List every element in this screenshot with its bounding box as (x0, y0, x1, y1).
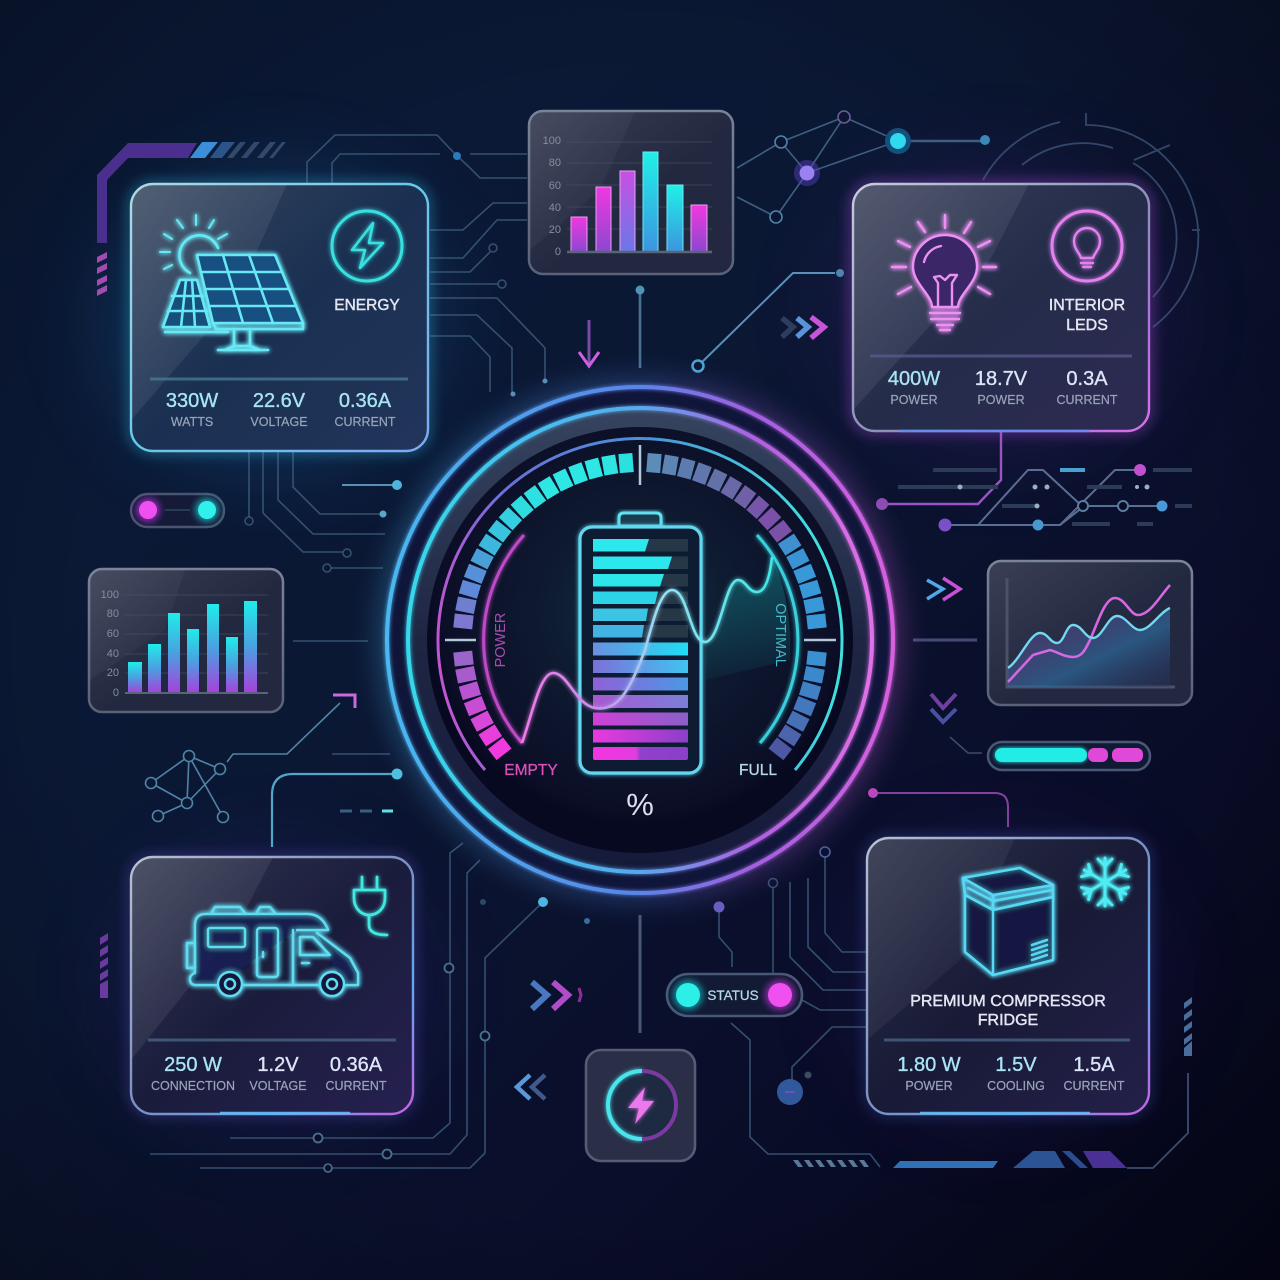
curve fill (705, 557, 790, 680)
stats: 0.36A (330, 1054, 383, 1076)
panel: camper van (131, 857, 413, 1114)
connector to progress bar (950, 737, 982, 753)
label: full: FULL (739, 762, 777, 779)
circuit traces: left of fridge panel (714, 847, 880, 1167)
toggle: pink and cyan (131, 494, 224, 527)
gauge rings (387, 387, 893, 893)
stats: CURRENT (1056, 393, 1118, 407)
panel: energy (131, 184, 428, 451)
bar chart: left: 100 (101, 589, 119, 601)
gauge ticks: right (646, 453, 827, 760)
arrow: down (579, 320, 599, 366)
gauge halo (390, 390, 890, 890)
panel: interior LEDs (853, 184, 1149, 431)
stats: CURRENT (334, 415, 396, 429)
icon: bulb badge (1052, 211, 1122, 281)
icon: snowflake (1081, 858, 1129, 906)
label (1049, 297, 1125, 334)
stats: WATTS (171, 415, 213, 429)
bar chart: top: 20 (549, 224, 561, 236)
gauge tick marks: cardinal (445, 445, 836, 640)
stats: POWER (890, 393, 938, 407)
stats: POWER (905, 1079, 953, 1093)
connector line below gauge (638, 915, 642, 1033)
stats: 1.5A (1073, 1054, 1115, 1076)
stats: 1.2V (257, 1054, 299, 1076)
label: ENERGY (334, 297, 400, 314)
stats: CURRENT (1063, 1079, 1125, 1093)
icon: fridge (963, 868, 1053, 975)
stats: 1.80 W (897, 1054, 961, 1076)
connector line and node above gauge (636, 286, 644, 368)
stats: 330W (166, 390, 218, 412)
bar chart: top: 40 (549, 202, 561, 214)
stats: 22.6V (253, 390, 306, 412)
bar chart: top: 60 (549, 180, 561, 192)
icon: light bulb (892, 215, 996, 330)
stats (166, 390, 396, 429)
chevrons: left (517, 1075, 545, 1099)
inner arc: power (484, 535, 524, 743)
bar chart: left: 40 (107, 648, 119, 660)
stats: COOLING (987, 1079, 1045, 1093)
circuit traces: below camper panel (150, 843, 590, 1172)
progress bar (988, 742, 1150, 770)
label (910, 993, 1106, 1029)
label: empty: EMPTY (504, 762, 558, 779)
circuit traces: below energy panel (245, 451, 402, 641)
icon: plug (354, 877, 387, 935)
stats (888, 368, 1118, 407)
circuit traces: right of gauge (876, 431, 1192, 532)
network graph: lower left with arrow (146, 695, 355, 822)
stats: 0.36A (339, 390, 392, 412)
chevrons: status (532, 982, 581, 1009)
battery cells (593, 539, 688, 760)
stats: 18.7V (975, 368, 1028, 390)
bar chart: top: 80 (549, 157, 561, 169)
circuit traces: cyan elbow lower left (272, 754, 402, 847)
label: power: POWER (493, 613, 509, 667)
stats (151, 1054, 387, 1093)
chevrons: top right (782, 317, 824, 338)
bar chart: left: 0 (113, 687, 119, 699)
bar chart: top: 100 (543, 135, 561, 147)
panel: compressor fridge (867, 838, 1149, 1114)
label: PREMIUM COMPRESSOR (910, 993, 1106, 1010)
icon tile: power (586, 1050, 695, 1161)
stats: 250 W (164, 1054, 222, 1076)
stats (897, 1054, 1125, 1093)
inner arc: optimal (757, 535, 798, 743)
stats: 400W (888, 368, 940, 390)
stats: POWER (977, 393, 1025, 407)
circuit traces: top right network (737, 111, 990, 223)
label: percent: % (626, 787, 654, 822)
status pill (667, 974, 802, 1016)
chevrons: down (931, 694, 956, 722)
chevrons: right (927, 578, 960, 600)
stats: CURRENT (325, 1079, 387, 1093)
gauge ticks: left (453, 453, 634, 760)
bar chart: top: 0 (555, 246, 561, 258)
circuit traces: top left (307, 135, 548, 396)
bar chart: left: 60 (107, 628, 119, 640)
line chart: right (988, 561, 1192, 705)
decoration: bottom right blocks (793, 997, 1192, 1168)
bar chart: top (529, 111, 733, 274)
circuit trace: magenta elbow lower right (868, 788, 1008, 827)
decoration: left hatch (100, 933, 108, 998)
battery (580, 513, 701, 773)
connector line to light panel (692, 269, 844, 372)
stats: VOLTAGE (249, 1079, 307, 1093)
stats: 1.5V (995, 1054, 1037, 1076)
connector line right of gauge (913, 638, 977, 642)
gauge: battery dial (387, 387, 893, 893)
icon: solar panel and sun (160, 215, 303, 350)
bar chart: left: 80 (107, 608, 119, 620)
stats: 0.3A (1066, 368, 1108, 390)
bar chart: left (89, 569, 283, 712)
bar chart: left: 20 (107, 667, 119, 679)
status pill: STATUS (707, 988, 759, 1003)
label: optimal: OPTIMAL (772, 603, 788, 667)
label: FRIDGE (978, 1012, 1038, 1029)
decoration: top left bracket (97, 142, 286, 296)
icon: camper van (187, 907, 358, 996)
label: LEDS (1066, 317, 1108, 334)
circuit rings: top right (983, 113, 1200, 327)
label: INTERIOR (1049, 297, 1125, 314)
charge curve (522, 557, 772, 743)
stats: VOLTAGE (250, 415, 308, 429)
stats: CONNECTION (151, 1079, 235, 1093)
icon: energy bolt (332, 211, 402, 281)
